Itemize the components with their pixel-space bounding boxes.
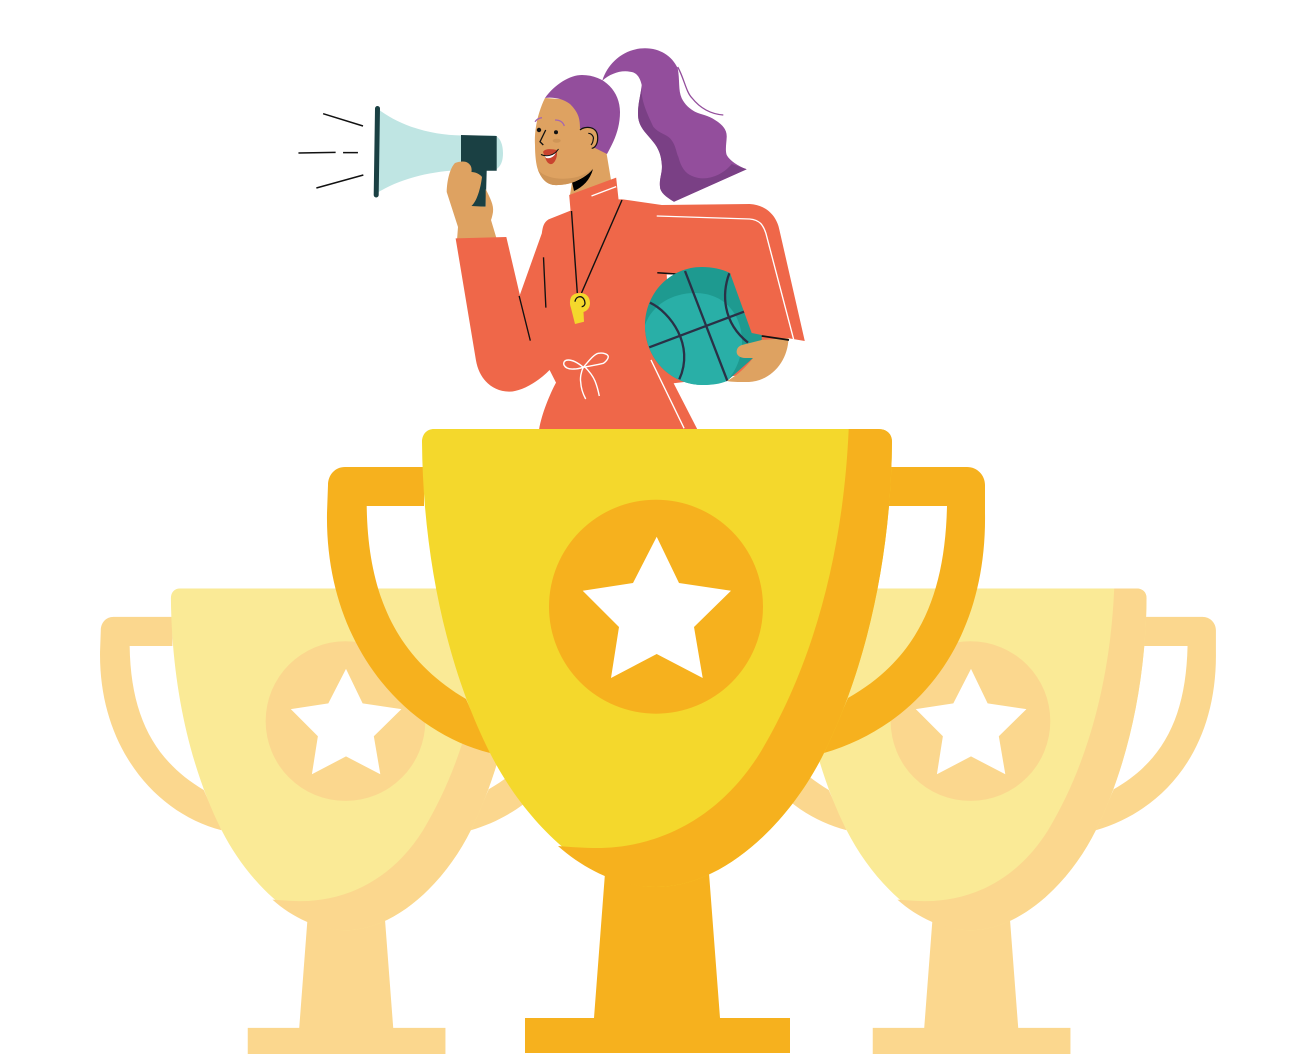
right faded trophy [725,589,1216,1054]
hand holding megaphone [447,162,497,240]
icon: star [583,537,731,678]
face [535,98,607,185]
medallion circle [549,500,763,714]
coach figure [298,48,805,429]
underarm highlight [667,274,675,280]
basketball [645,267,762,385]
trophy cup [422,429,892,887]
underarm line [657,273,684,274]
neck [570,150,611,195]
trophy handles [327,467,985,753]
cuff line [762,336,789,340]
neck shadow [572,169,593,191]
icon: megaphone [376,108,503,207]
main trophy [327,429,985,1053]
hair [545,75,620,154]
track jacket [456,178,805,429]
sound lines [298,114,363,188]
trophy stem and base [525,860,790,1053]
hand under ball [727,338,788,382]
drawstring bow [564,353,608,399]
ponytail [602,48,747,202]
ear [578,127,598,149]
left faded trophy [100,589,591,1054]
cup shading [558,429,892,887]
lanyard [572,200,622,293]
icon: whistle [570,293,590,324]
